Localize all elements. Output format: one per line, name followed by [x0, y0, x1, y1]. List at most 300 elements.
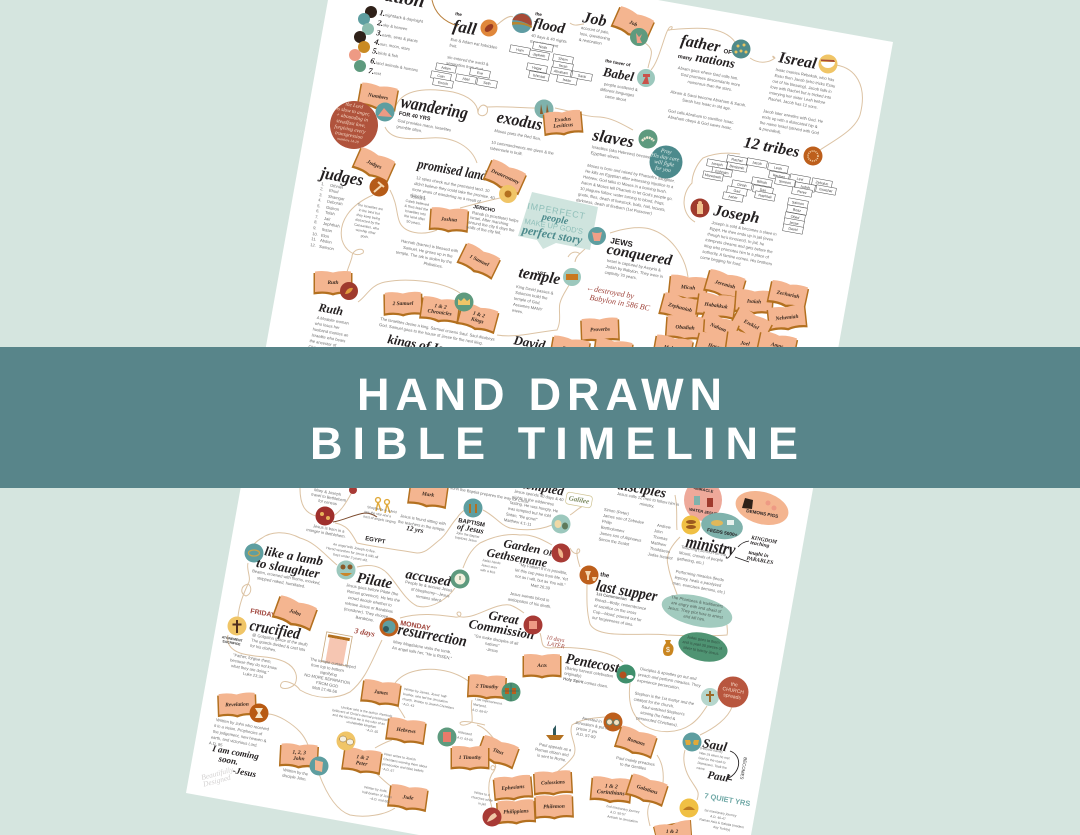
text: creation list: land animals & humans	[376, 60, 418, 73]
text: Israelites in the land: gods.	[360, 234, 369, 239]
icon: nativity	[316, 506, 334, 526]
book: Philippians: Philippians	[503, 808, 529, 816]
icon: Peter	[336, 732, 356, 750]
text: born: manger in Bethlehem.	[306, 527, 346, 539]
book: Ruth	[314, 271, 352, 296]
section: Ruth: who loses her	[314, 321, 341, 330]
book: 1 Timothy: 1 Timothy	[459, 755, 482, 761]
section: Jews conquered	[602, 236, 675, 286]
book: 1&2 Peter	[341, 746, 383, 776]
section: Isreal: marrying her sister Leah before	[769, 90, 827, 105]
callout: feeds 5000: FEEDS 5000+	[706, 527, 738, 539]
section: Jews conquered: Judah by Babylon. They were in	[605, 264, 664, 279]
callout: imperfect people	[518, 192, 598, 250]
family tree: tribes: Obed	[790, 215, 800, 220]
callout: Pharisees: The Pharisees & traditioners	[671, 594, 724, 609]
text: Peter: Peter writes to Jewish	[384, 752, 416, 762]
section: Ruth: Ruth	[316, 300, 345, 318]
section: garden of Gethsemane: Garden OF	[502, 536, 556, 559]
text: Hebrews: and the fact that He is the ruler of an	[332, 713, 386, 726]
list: judges: Abdon	[320, 238, 333, 245]
book: Romans	[614, 725, 658, 760]
book: 2 Samuel	[383, 292, 423, 317]
section: the fall: fall	[451, 16, 478, 39]
section: the fall: fruit.	[449, 43, 458, 49]
text: Pilate: Jesus goes before Pilate (the	[346, 582, 400, 597]
banner title: HAND DRAWN	[357, 369, 722, 420]
text: betray: Jesus over	[481, 563, 498, 570]
section: Jews conquered: Israel is captured by Assyria &	[606, 258, 662, 273]
book: Acts: Acts	[536, 663, 547, 669]
section: tower of Babel	[598, 58, 643, 104]
text: communion: of sacrifice on the cross	[594, 603, 637, 615]
section: Isreal: out of his blessing). Jacob falls in	[772, 78, 833, 94]
section: Job: Job	[580, 9, 608, 30]
icon: day circles	[349, 6, 377, 72]
list: judges: Deborah	[327, 199, 344, 207]
list: judges: Ehud	[329, 188, 340, 194]
section: Joseph: though he's innocent). In jail, he	[707, 231, 765, 247]
callout: red circle quote: forgiving every	[334, 123, 367, 136]
text: Revelation: A.D. 95	[209, 740, 224, 748]
text: Peter: Christians warning them about	[383, 757, 428, 769]
icon: tent	[376, 102, 394, 122]
family tree: tribes: Judah	[800, 184, 810, 190]
section: tower of Babel: different languages	[600, 87, 635, 98]
text: disciples and apostles: experience persecution.	[637, 678, 680, 690]
text: Joshua & Caleb: Joshua &	[410, 195, 427, 201]
section: garden of Gethsemane: Gethsemane	[486, 545, 549, 570]
text: Revelation: the judgement, new heaven &	[213, 729, 267, 743]
icon: last supper	[580, 566, 598, 584]
text: resurrection: An angel tells her, "He is RISEN."	[392, 645, 453, 661]
text: released: A.D. 63-65	[457, 735, 473, 742]
text: Pilate: release Jesus or Barabbas	[345, 600, 393, 614]
arrow: becomes	[727, 751, 739, 780]
book: Romans: Romans	[625, 736, 646, 748]
family tree: Noah: Abraham	[553, 69, 568, 76]
book: Acts	[522, 654, 562, 678]
text: curtain: signifying	[320, 669, 338, 677]
text: tempted: Satan, "Be gone!"	[506, 511, 539, 522]
list: judges: 7.	[315, 214, 319, 220]
heading: lamb: to slaughter	[255, 555, 322, 581]
section: Job: & restoration	[578, 37, 603, 46]
section: father of many nations: father OF	[679, 32, 734, 58]
text: Pilate: crowd decide whether to	[348, 595, 393, 608]
text: creation list: nightdark & day/night	[385, 12, 424, 24]
section: the fall: the	[455, 11, 463, 17]
list: judges: Ibzan	[322, 227, 333, 234]
callout: red circle quote: the Lord	[345, 101, 364, 111]
callout: red circle quote: numbers 14:18	[337, 137, 359, 144]
section: Isreal	[758, 48, 840, 143]
section: 12 tribes heading: 12 tribes	[742, 134, 801, 161]
text: creation list: 5.	[372, 46, 379, 56]
section: tempted	[504, 476, 593, 534]
icon: Saul	[682, 732, 702, 752]
section: Numbers book: Numbers	[366, 92, 389, 102]
text: Joshua & Caleb: Israelites into	[405, 209, 426, 217]
book: Hebrews: Hebrews	[395, 727, 416, 735]
callout: imperfect people: MAKE UP GOD'S	[524, 217, 584, 236]
text: missionary 1: A.D. 46-47	[710, 814, 726, 821]
text: betray: Judas hands	[482, 558, 501, 565]
book: Jude	[387, 783, 429, 813]
book: Philemon: Philemon	[543, 804, 565, 810]
icon: bread stone	[552, 514, 570, 534]
book: 1 Samuel: 1 Samuel	[468, 254, 490, 268]
label: EGYPT: EGYPT	[365, 536, 386, 546]
text: prayer	[507, 561, 570, 611]
text: journey 2: A.D. 50-57	[610, 810, 626, 817]
family tree: tribes: Dinah	[737, 182, 747, 188]
section: 1st temple: King David passes &	[516, 284, 554, 296]
section: Isreal: Isreal	[776, 49, 818, 73]
callout: teal circle: for you	[655, 164, 672, 174]
family tree: tribes: Leah	[774, 166, 782, 171]
section: the fall: separation from God.	[446, 60, 485, 72]
text: accused: of blasphemy—Jesus	[411, 586, 450, 598]
book: 1,2,3 John	[279, 743, 319, 770]
text: Revelation: earth, and victorious Lord.	[211, 734, 258, 748]
text: ministry: man, exorcises demons, etc.)	[672, 580, 726, 595]
text: Peter: persecution and false beliefs	[382, 762, 424, 773]
book: 1&2 Thessalonians: 1 & 2	[666, 829, 678, 835]
text: forgive them: "Father, forgive them,	[233, 652, 272, 664]
icon: hourglass	[250, 704, 268, 722]
section: judges: judges	[316, 163, 365, 190]
text: Paul preaches: Paul mainly preaches	[616, 755, 655, 767]
text: Revelation: it in a vision. Prophecies of	[214, 723, 263, 737]
note: 10 days	[545, 635, 566, 650]
text: disciples list: Jesus calls 12 men to follow him in	[617, 491, 680, 507]
list: judges: Samson	[319, 244, 335, 251]
section: slaves: gnats, flies, death of livestock, boils, hail, locusts,	[578, 191, 666, 212]
text: Jericho	[466, 204, 520, 238]
section: Jews conquered: conquered	[605, 242, 674, 269]
books: prophets: Zephaniah	[667, 302, 692, 314]
list: judges: Gideon	[326, 205, 340, 212]
text: accused: remains silent.	[415, 593, 442, 603]
icon: flood	[512, 13, 532, 33]
callout: teal circle: will fight	[654, 158, 675, 169]
icon: cross	[701, 688, 719, 706]
text: disciples list: ministry.	[639, 501, 655, 509]
section: the flood: then atonement	[530, 39, 560, 49]
note: destroyed by Babylon: ←destroyed by	[586, 283, 635, 301]
icon: released	[438, 728, 456, 746]
text: crucified: @ Golgotha (place of the skull)	[252, 632, 309, 647]
text: Jesus found: the teachers in the temple.	[398, 519, 446, 532]
section: Pilate	[336, 560, 402, 627]
books: prophets	[549, 268, 810, 367]
text: desire a king: God. Samuel goes to the house of Jesse for the next king.	[379, 322, 483, 346]
note: kingdom teaching: teaching	[750, 540, 770, 549]
text: creation list: sky & heaven	[383, 22, 409, 32]
text: commission	[472, 633, 519, 657]
text: accused	[403, 579, 453, 605]
family tree: Adam: Seth	[483, 81, 491, 86]
heading: baptism of Jesus: BAPTISM	[458, 518, 485, 529]
text: creation list: 6.	[370, 56, 377, 66]
text: Pilate: Roman governor). He lets the	[347, 589, 401, 603]
section: temple curtain	[302, 626, 376, 697]
text: Jericho: around the city 6 days the	[468, 219, 516, 233]
book: Colossians	[533, 770, 573, 797]
book: John: John	[287, 608, 302, 618]
text: journey 2: 2nd missionary journey	[606, 804, 640, 814]
text: Israelites in the land: worship other	[355, 228, 377, 236]
quote: I am coming soon	[207, 743, 261, 779]
section: father of many nations: Sarah has Isaac in old age.	[682, 97, 732, 111]
family tree: tribes: David	[788, 227, 798, 232]
section: 1st temple: temple	[517, 264, 562, 288]
text: commission: "Go make disciples of all	[474, 633, 519, 646]
watermark: Designed	[201, 773, 232, 789]
text: Jude: half-brother of Jesus	[362, 790, 393, 799]
books: prophets: Ezekiel	[742, 318, 760, 332]
text: communion: 1st Communion	[596, 591, 628, 602]
text: prayer: Jesus sweats blood in	[510, 591, 551, 603]
heading: baptism of Jesus: baptizes Jesus	[455, 535, 477, 543]
list: judges: 3.	[319, 192, 323, 198]
text: disciples and apostles: preach and perform miracles. They	[638, 672, 702, 688]
section: Pentecost: Pentecost	[564, 651, 621, 677]
section: promised land: disbelief.	[410, 192, 426, 200]
arrows: ministry notes	[735, 541, 749, 562]
book: 1&2 Kings	[456, 301, 500, 335]
section: accused	[403, 567, 470, 605]
icon: garden	[552, 544, 570, 562]
text: Pentecost: (Barley harvest celebration	[565, 665, 614, 679]
text: James	[401, 687, 456, 715]
heading: David: David	[511, 332, 547, 353]
text: creation list	[368, 8, 425, 77]
text: disciples and apostles: catalyst for the church.	[633, 696, 675, 709]
family tree: tribes: Joseph	[711, 161, 723, 167]
text: ministry: Mount, crowds of people	[679, 550, 724, 563]
book: 1 Samuel	[456, 242, 502, 281]
text: commission: -Jesus	[486, 646, 498, 653]
book: Joshua: Joshua	[440, 216, 458, 224]
text: Jude: ~A.D. mid 60s	[369, 796, 390, 804]
list: judges: 2.	[320, 186, 324, 192]
family tree: tribes: Reuben	[772, 173, 785, 179]
section: exodus	[490, 107, 561, 162]
callout: Judas: and is paid 30 pieces of	[682, 640, 723, 651]
book: 1,2,3 John: 1, 2, 3	[292, 750, 306, 756]
heading: last supper: last supper	[595, 578, 659, 606]
text: shepherds	[363, 505, 398, 524]
text: ministry: Performing miracles (feeds	[675, 569, 724, 582]
text: Jericho: Israel. After marching	[470, 215, 510, 227]
callout: Pharisees: and kill him.	[683, 613, 706, 622]
text: creation list: 7.	[368, 66, 375, 76]
text: disciples list: Andrew	[657, 523, 671, 530]
text: released: Released	[458, 730, 472, 737]
family tree: Adam: Enosh	[438, 80, 448, 86]
text: creation list: 3.	[375, 28, 383, 38]
text: resurrection: Mary Magdalene visits the tomb.	[393, 639, 452, 655]
family tree: Noah	[510, 42, 592, 85]
book: Philippians	[496, 799, 536, 826]
callout: imperfect people: IMPERFECT	[527, 201, 587, 221]
section: father of many nations: Abram & Sarai become Abraham & Sarah.	[670, 89, 747, 108]
family tree: Adam: Adam	[441, 65, 451, 71]
family tree: tribes: Salmon	[792, 200, 804, 206]
book: 1,2,3 John: John	[292, 756, 305, 762]
section: great commission: Commission	[468, 616, 536, 642]
text: Hannah: Samuel. He grows up in the	[403, 245, 454, 259]
text: communion: Cup—blood: poured out for	[593, 609, 643, 623]
books: prophets: Hosea	[706, 342, 723, 352]
text: shepherds: host of angels singing	[363, 515, 396, 524]
text: disciples list: Simon (Peter)	[604, 507, 630, 516]
callout: red circle quote	[330, 100, 378, 149]
text: writes 4: Writes to 4	[474, 790, 490, 797]
text: Hebrews: unshakable kingdom	[346, 720, 377, 729]
family tree: Noah: Shem	[558, 56, 568, 62]
section: promised land	[410, 157, 500, 212]
section: Ruth: Israelite who bears	[311, 332, 346, 343]
text: angel tells Joseph	[325, 541, 380, 564]
icon: tomb	[380, 618, 398, 636]
callout: red circle quote: is slow to anger,	[336, 106, 370, 118]
icon: baptism	[464, 498, 482, 518]
book: Mark: Mark	[421, 491, 435, 499]
section: Job: loss, questioning	[579, 31, 611, 41]
section: tower of Babel: came about	[604, 94, 627, 102]
text: born	[306, 522, 347, 539]
note: destroyed by Babylon	[584, 283, 653, 313]
icon: Pentecost	[616, 664, 636, 684]
text: Jesus found	[398, 513, 447, 532]
book: 2 Timothy: 2 Timothy	[475, 683, 499, 691]
list: judges: 11.	[311, 236, 317, 242]
list: judges: 1.	[321, 181, 325, 187]
book: Hebrews	[385, 716, 427, 746]
icon: Joseph	[690, 198, 710, 218]
text: Saul: Was 24 when he met	[699, 751, 730, 760]
section: the flood	[530, 11, 571, 50]
family tree: Noah: Japheth	[532, 52, 546, 58]
icon: Isreal bowl	[818, 54, 838, 74]
text: James: church. Written to Jewish Christians	[402, 697, 455, 710]
book: Revelation	[217, 692, 257, 718]
icon: Deuteronomy	[499, 185, 517, 203]
text: Jesus found: Jesus is found sitting with	[400, 513, 447, 526]
text: Hebrews: Unclear who is the author. Reminds	[341, 705, 393, 718]
text: crucified	[250, 632, 309, 658]
text: beaten: stripped naked, humiliated.	[257, 575, 306, 589]
text: betray	[480, 558, 501, 575]
text: disciples list: James son of Zebedee	[603, 513, 645, 525]
text: arrested: Arrested in	[582, 715, 603, 724]
text: James: brother, who led the Jerusalem	[403, 692, 448, 704]
section: Saul to Paul	[680, 732, 751, 834]
text: Saul: name	[696, 766, 705, 771]
section: Isreal: Jacob later wrestles with God. He	[763, 108, 824, 124]
text: communion: our forgiveness of sins.	[592, 615, 634, 627]
section: slaves: Moses is born and raised by Pharaoh's daughter.	[587, 163, 675, 183]
section: slaves: Israelites (aka Hebrews) become	[591, 144, 652, 160]
icon: fall	[480, 20, 498, 36]
section: wandering: FOR 40 YRS	[398, 111, 431, 123]
book: 1&2 Peter: 1 & 2	[356, 754, 369, 762]
book: Galatians: Galatians	[636, 784, 658, 796]
text: ministry: leprosy, heals a paralyzed	[674, 575, 722, 588]
section: tower of Babel: people scattered &	[604, 81, 638, 92]
text: Mary and Joseph	[310, 487, 348, 508]
text: born: Jesus is born in a	[313, 523, 346, 534]
section: father of many nations	[666, 32, 757, 132]
text: James: Written by James, Jesus' half-	[404, 687, 448, 699]
family tree: tribes: Levi	[796, 177, 804, 182]
book: Exodus Leviticus	[543, 109, 584, 137]
text: disciples list	[597, 489, 684, 561]
text: Pilate	[340, 582, 402, 627]
text: Revelation: Written by John who received	[216, 717, 270, 732]
book: Deuteronomy: Deuteronomy	[489, 168, 521, 186]
text: curtain: from top to bottom	[311, 662, 345, 673]
icon: accused	[450, 570, 470, 588]
icon: temple	[563, 268, 581, 286]
text: disciples list: John	[654, 528, 664, 535]
text: Roman citizen: Paul appeals as a	[539, 742, 572, 752]
text: forgive them	[228, 652, 279, 682]
text: tempted	[504, 488, 565, 532]
icon: glasses	[604, 712, 622, 732]
section: Isreal: Rachel. Jacob has 12 sons.	[768, 96, 818, 110]
section: wandering: wandering	[399, 91, 470, 123]
text: disciples and apostles: Saul watched Stephen's	[641, 704, 685, 717]
text: crucified: for his clothes.	[250, 643, 277, 653]
family tree: Noah: Ham	[516, 48, 524, 53]
icon: money bag	[663, 640, 674, 656]
section: 1st temple: 1ST	[536, 270, 547, 278]
text: crucified: The guards divided & cast lots	[251, 637, 306, 652]
section: Isreal: love with Rachel but is tricked into	[770, 84, 832, 100]
text: John	[282, 767, 309, 782]
note: 10 days: 10 days	[546, 635, 566, 644]
section: slaves: slaves	[590, 125, 636, 151]
icon: money bag: $	[666, 647, 670, 654]
section: Joseph: Egypt. He then ends up in jail (even	[709, 226, 774, 242]
text: disciples and apostles	[630, 666, 703, 731]
text: last imprisonment	[472, 697, 503, 717]
section: epistles	[199, 674, 692, 835]
heading: baptism of Jesus: of Jesus	[456, 522, 484, 536]
books: prophets: Isaiah	[746, 298, 761, 305]
text: Hebrews: ~A.D. 65	[365, 728, 379, 734]
callout: Pharisees: are angry with and afraid of	[671, 600, 723, 614]
text: arrested: prison 2 yrs	[576, 726, 598, 734]
section: slaves: He kills an Egyptian after witnessing injustice to a	[585, 168, 675, 189]
section: great commission	[468, 604, 566, 657]
section: Isreal: the name Israel (strived with God	[759, 120, 820, 136]
heading: Pilate: Pilate	[355, 570, 394, 592]
book: 1&2 Peter: Peter	[355, 760, 369, 768]
section: accused: accused	[404, 567, 453, 590]
book: 2 Timothy	[467, 674, 507, 701]
text: angel tells Joseph: Herod searches for Jesus & kills all	[326, 546, 379, 559]
icon: Babel	[637, 69, 655, 87]
text: curtain: Matt 27:45-56	[312, 685, 338, 694]
text: tempted: was tempted but he told	[508, 506, 552, 518]
label: Friday: FRIDAY	[250, 608, 276, 620]
quote: I am coming soon: -Jesus	[232, 765, 257, 779]
